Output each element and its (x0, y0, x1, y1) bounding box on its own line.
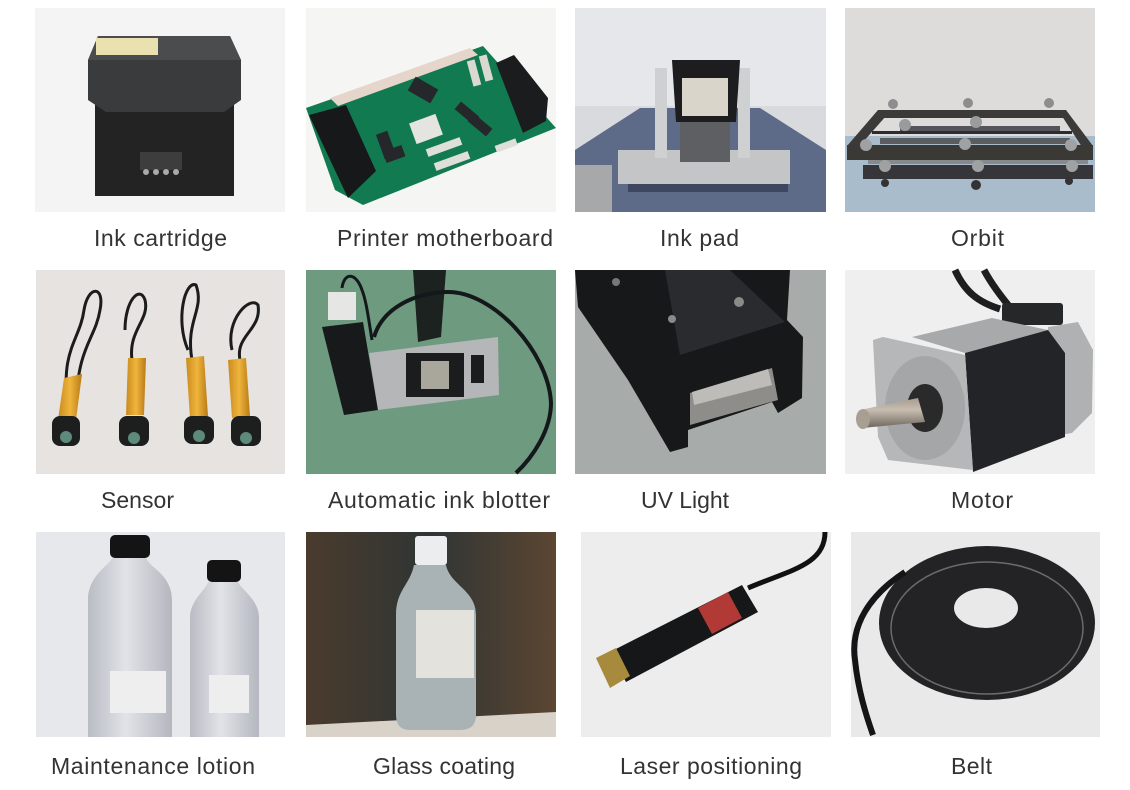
icon: glass bottle (396, 536, 476, 730)
icon: servo motor (856, 270, 1093, 472)
label: printer motherboard: Printer motherboard (337, 225, 553, 251)
label: motor: Motor (951, 487, 1013, 513)
panel: ink cartridge (35, 8, 285, 212)
icon: belt coil (854, 546, 1095, 735)
icon: rail frame (847, 98, 1093, 190)
panel: laser positioning (581, 532, 831, 737)
label: UV light: UV Light (641, 487, 730, 513)
panel: belt (851, 532, 1100, 737)
panel: motor (845, 270, 1095, 474)
icon: circuit board (306, 46, 556, 205)
panel: glass coating (306, 532, 556, 737)
icon: sensors (52, 285, 261, 446)
panel: maintenance lotion (36, 532, 285, 737)
panel: automatic ink blotter (306, 270, 556, 474)
panel: orbit (845, 8, 1095, 212)
panel: UV light (575, 270, 826, 474)
icon: blotter unit (322, 270, 551, 473)
panel: printer motherboard (306, 8, 556, 212)
label: laser positioning: Laser positioning (620, 753, 802, 779)
icon: capping station (575, 60, 826, 212)
label: sensor: Sensor (101, 487, 174, 513)
panel: sensor (36, 270, 285, 474)
label: automatic ink blotter: Automatic ink blotter (328, 487, 550, 513)
panel: ink pad (575, 8, 826, 212)
label: maintenance lotion: Maintenance lotion (51, 753, 255, 779)
icon: lotion bottles (88, 535, 259, 737)
label: orbit: Orbit (951, 225, 1005, 251)
label: glass coating: Glass coating (373, 753, 515, 779)
label: belt: Belt (951, 753, 993, 779)
icon: cartridge body (88, 36, 241, 196)
label: ink pad: Ink pad (660, 225, 739, 251)
icon: laser module (596, 532, 825, 688)
icon: UV lamp (575, 270, 803, 452)
label: ink cartridge: Ink cartridge (94, 225, 227, 251)
